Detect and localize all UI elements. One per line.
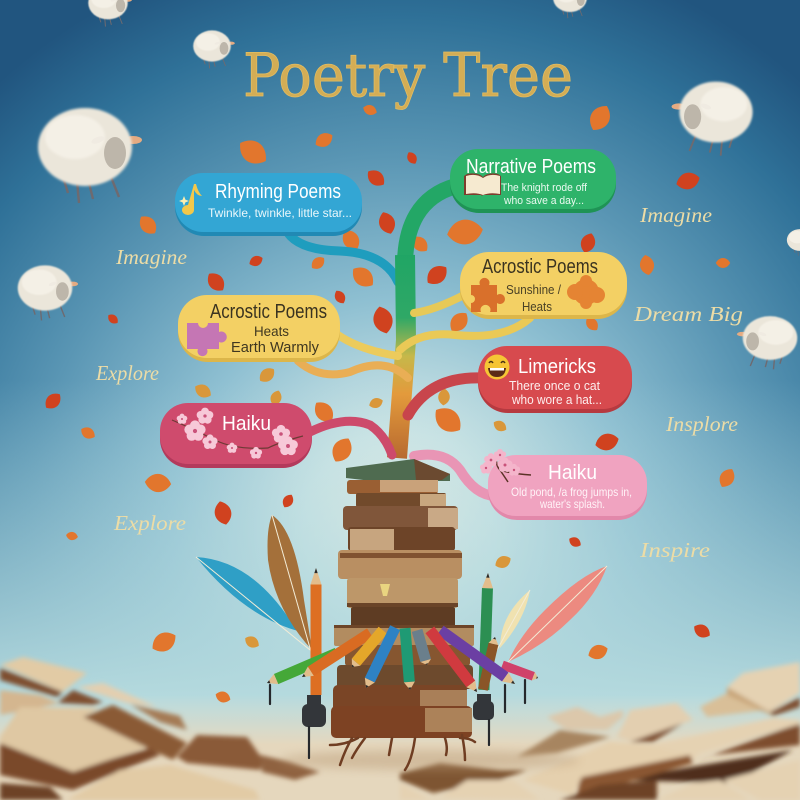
bubble: acrostic poems left: Heats (254, 323, 289, 339)
bubble: rhyming poems: Rhyming Poems (215, 181, 341, 203)
pencil: grey (412, 629, 432, 667)
icon: music note (179, 184, 202, 215)
bubble: acrostic poems left (178, 295, 340, 362)
bubble: limericks: who wore a hat... (511, 392, 602, 407)
icon: puzzle piece purple (187, 323, 227, 356)
floating words (95, 203, 743, 562)
roots (330, 735, 475, 770)
bubble: acrostic poems right (460, 252, 627, 319)
bubble: narrative poems (450, 149, 616, 213)
pencil: upright brown (478, 636, 500, 691)
floating words: Imagine (639, 203, 712, 227)
bubble: narrative poems: The knight rode off (501, 182, 588, 194)
ink bottle right (473, 694, 494, 720)
branch: left lower (298, 361, 408, 378)
pencil: orange (299, 628, 373, 682)
floating words: Dream Big (633, 302, 743, 326)
bubble: limericks (478, 346, 632, 413)
pencil: upright green (478, 573, 493, 690)
feather: pink (508, 566, 607, 662)
bubble: acrostic poems right: Acrostic Poems (482, 256, 598, 278)
feathers (196, 515, 607, 665)
bubble: haiku right: water's splash. (539, 497, 605, 511)
far book cluster (547, 707, 623, 730)
branch: narrative poems (405, 186, 456, 270)
bubble: narrative poems: Narrative Poems (466, 156, 596, 178)
bubble: narrative poems: who save a day... (503, 195, 584, 207)
book 11 (337, 665, 473, 689)
sheep (18, 0, 800, 369)
book 9 (334, 625, 474, 646)
icon: laughing emoji (484, 354, 510, 380)
bubble: rhyming poems: Twinkle, twinkle, little star... (208, 206, 352, 220)
floating words: Explore (113, 511, 186, 535)
branch: acrostic right (414, 295, 464, 313)
bubble: rhyming poems (175, 173, 362, 236)
floating words: Insplore (665, 412, 738, 436)
pencil: red (425, 627, 481, 695)
bubble: acrostic poems left: Acrostic Poems (210, 301, 327, 323)
stack of books (330, 459, 475, 770)
branch: haiku right (414, 455, 495, 496)
pencil: pink (501, 661, 540, 682)
feather: blue (196, 557, 302, 632)
book 10 (345, 645, 470, 666)
book 4 (343, 506, 458, 530)
book 7 (347, 578, 458, 608)
ground of open books (0, 657, 800, 800)
branch: acrostic right lower (400, 318, 530, 350)
ink bottles and drips (270, 680, 525, 758)
pencil: upright orange (310, 568, 322, 695)
book 12 (333, 685, 467, 713)
book 3 (356, 493, 446, 507)
ink bottle left (302, 695, 326, 727)
book 8 (351, 607, 455, 628)
bubble: haiku right: Haiku (548, 462, 597, 484)
bubble: acrostic poems right: Heats (522, 299, 552, 314)
title: Poetry Tree (243, 41, 573, 111)
book 2 (347, 480, 438, 494)
trunk (397, 255, 406, 458)
pencil: green (265, 648, 339, 688)
icon: puzzle piece round (567, 275, 605, 309)
pencil: purple (437, 626, 518, 688)
book: green top (346, 459, 450, 481)
branch: acrostic left (338, 335, 398, 356)
book 6 (338, 550, 462, 579)
ink drips (270, 680, 525, 758)
bubble: haiku left: Haiku (222, 413, 271, 435)
feather: cream (500, 590, 530, 648)
tree branches and trunk (288, 186, 530, 496)
icon: puzzle piece orange (471, 278, 505, 312)
branch: rhyming poems (288, 233, 398, 282)
floating words: Explore (95, 361, 159, 385)
bubble: haiku right (480, 449, 647, 520)
branch: limericks (408, 378, 482, 415)
pencils fan (265, 568, 540, 695)
right lower pages (400, 763, 527, 793)
bubble: haiku left (160, 403, 312, 468)
feather: brown (268, 515, 312, 650)
bubble: limericks: Limericks (518, 356, 596, 378)
falling leaves (42, 101, 738, 705)
floating words: Inspire (639, 538, 710, 562)
pencil: teal green (400, 628, 415, 690)
icon: cherry blossom branch (480, 449, 531, 482)
branch: haiku left (310, 421, 392, 455)
pencil: yellow (348, 627, 387, 671)
book 5 (348, 527, 455, 551)
icon: cherry blossoms (172, 408, 303, 459)
bubble: haiku right: Old pond, /a frog jumps in, (511, 485, 632, 499)
icon: open book (464, 173, 501, 196)
floating words: Imagine (115, 245, 187, 269)
bubble: limericks: There once o cat (509, 378, 600, 393)
bubble: acrostic poems left: Earth Warmly (231, 339, 319, 356)
right large open book (693, 723, 800, 762)
left books (0, 657, 87, 692)
book 13 (331, 706, 472, 738)
pencil: blue (361, 625, 400, 690)
bubble: acrostic poems right: Sunshine / (506, 282, 561, 297)
